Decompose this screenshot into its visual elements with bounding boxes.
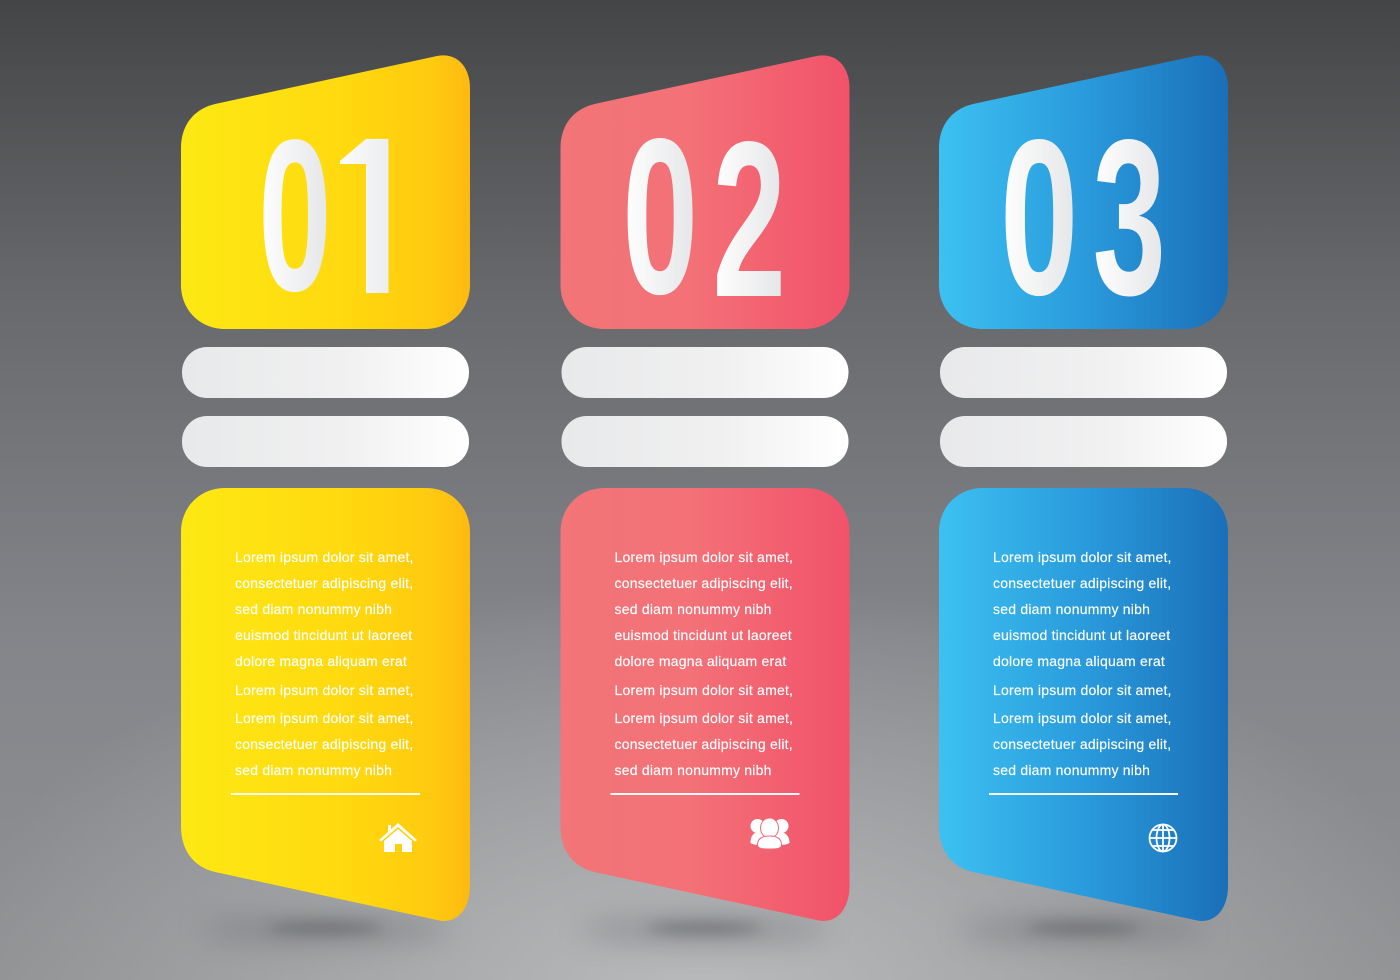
floor shadow 01 (200, 916, 450, 944)
number 03: 3 (1093, 93, 1166, 341)
body text 03: consectetuer adipiscing elit, (993, 575, 1171, 591)
body text 01 (235, 549, 414, 778)
panel: column 02 (560, 55, 850, 944)
body text 02: euismod tincidunt ut laoreet (614, 627, 792, 643)
body text 02: Lorem ipsum dolor sit amet, (614, 682, 793, 698)
body text 03: Lorem ipsum dolor sit amet, (993, 549, 1172, 565)
body text 01: Lorem ipsum dolor sit amet, (235, 549, 414, 565)
panel: column 01 (181, 55, 470, 944)
number 02 (622, 93, 786, 343)
blank pill 01b (182, 416, 469, 467)
blank pill 02b (562, 416, 848, 467)
body text 03: dolore magna aliquam erat (993, 653, 1165, 669)
body text 01: euismod tincidunt ut laoreet (235, 627, 412, 643)
body text 02: consectetuer adipiscing elit, (614, 575, 793, 591)
header card 03 (939, 55, 1228, 329)
blank pill 03a (940, 347, 1227, 398)
panel: column 03 (939, 55, 1228, 944)
body text 02: Lorem ipsum dolor sit amet, (614, 710, 793, 726)
blank pill 02a (562, 347, 848, 398)
body text 03: sed diam nonummy nibh (993, 762, 1150, 778)
body text 01: consectetuer adipiscing elit, (235, 575, 413, 591)
text card 02 (560, 488, 850, 921)
body text 01: Lorem ipsum dolor sit amet, (235, 710, 414, 726)
body text 02: Lorem ipsum dolor sit amet, (614, 549, 793, 565)
floor shadow 02 (580, 916, 830, 944)
floor shadow 03 (958, 916, 1208, 944)
body text 03: sed diam nonummy nibh (993, 601, 1150, 617)
body text 01: consectetuer adipiscing elit, (235, 736, 413, 752)
text card 03 (939, 488, 1228, 921)
header card 02 (560, 55, 850, 329)
number 03 (1000, 93, 1166, 342)
text card 01 (181, 488, 470, 921)
body text 02 (614, 549, 793, 778)
body text 03: euismod tincidunt ut laoreet (993, 627, 1170, 643)
body text 02: dolore magna aliquam erat (614, 653, 787, 669)
number 01 (264, 138, 388, 293)
body text 01: Lorem ipsum dolor sit amet, (235, 682, 414, 698)
body text 03: Lorem ipsum dolor sit amet, (993, 682, 1172, 698)
blank pill 03b (940, 416, 1227, 467)
number 01: 1 (324, 91, 420, 341)
body text 01: dolore magna aliquam erat (235, 653, 407, 669)
number 02: 2 (712, 95, 786, 343)
body text 02: sed diam nonummy nibh (614, 601, 772, 617)
number 01: 0 (258, 94, 332, 336)
icon: house (379, 823, 417, 852)
header card 01 (181, 55, 470, 329)
icon: globe (1150, 824, 1176, 852)
body text 03: consectetuer adipiscing elit, (993, 736, 1171, 752)
number 02: 0 (622, 93, 698, 341)
blank pill 01a (182, 347, 469, 398)
body text 03: Lorem ipsum dolor sit amet, (993, 710, 1172, 726)
body text 02: consectetuer adipiscing elit, (614, 736, 793, 752)
number 03: 0 (1000, 95, 1078, 342)
icon: people (750, 818, 790, 849)
body text 03 (993, 549, 1172, 778)
body text 02: sed diam nonummy nibh (614, 762, 772, 778)
body text 01: sed diam nonummy nibh (235, 601, 392, 617)
body text 01: sed diam nonummy nibh (235, 762, 392, 778)
